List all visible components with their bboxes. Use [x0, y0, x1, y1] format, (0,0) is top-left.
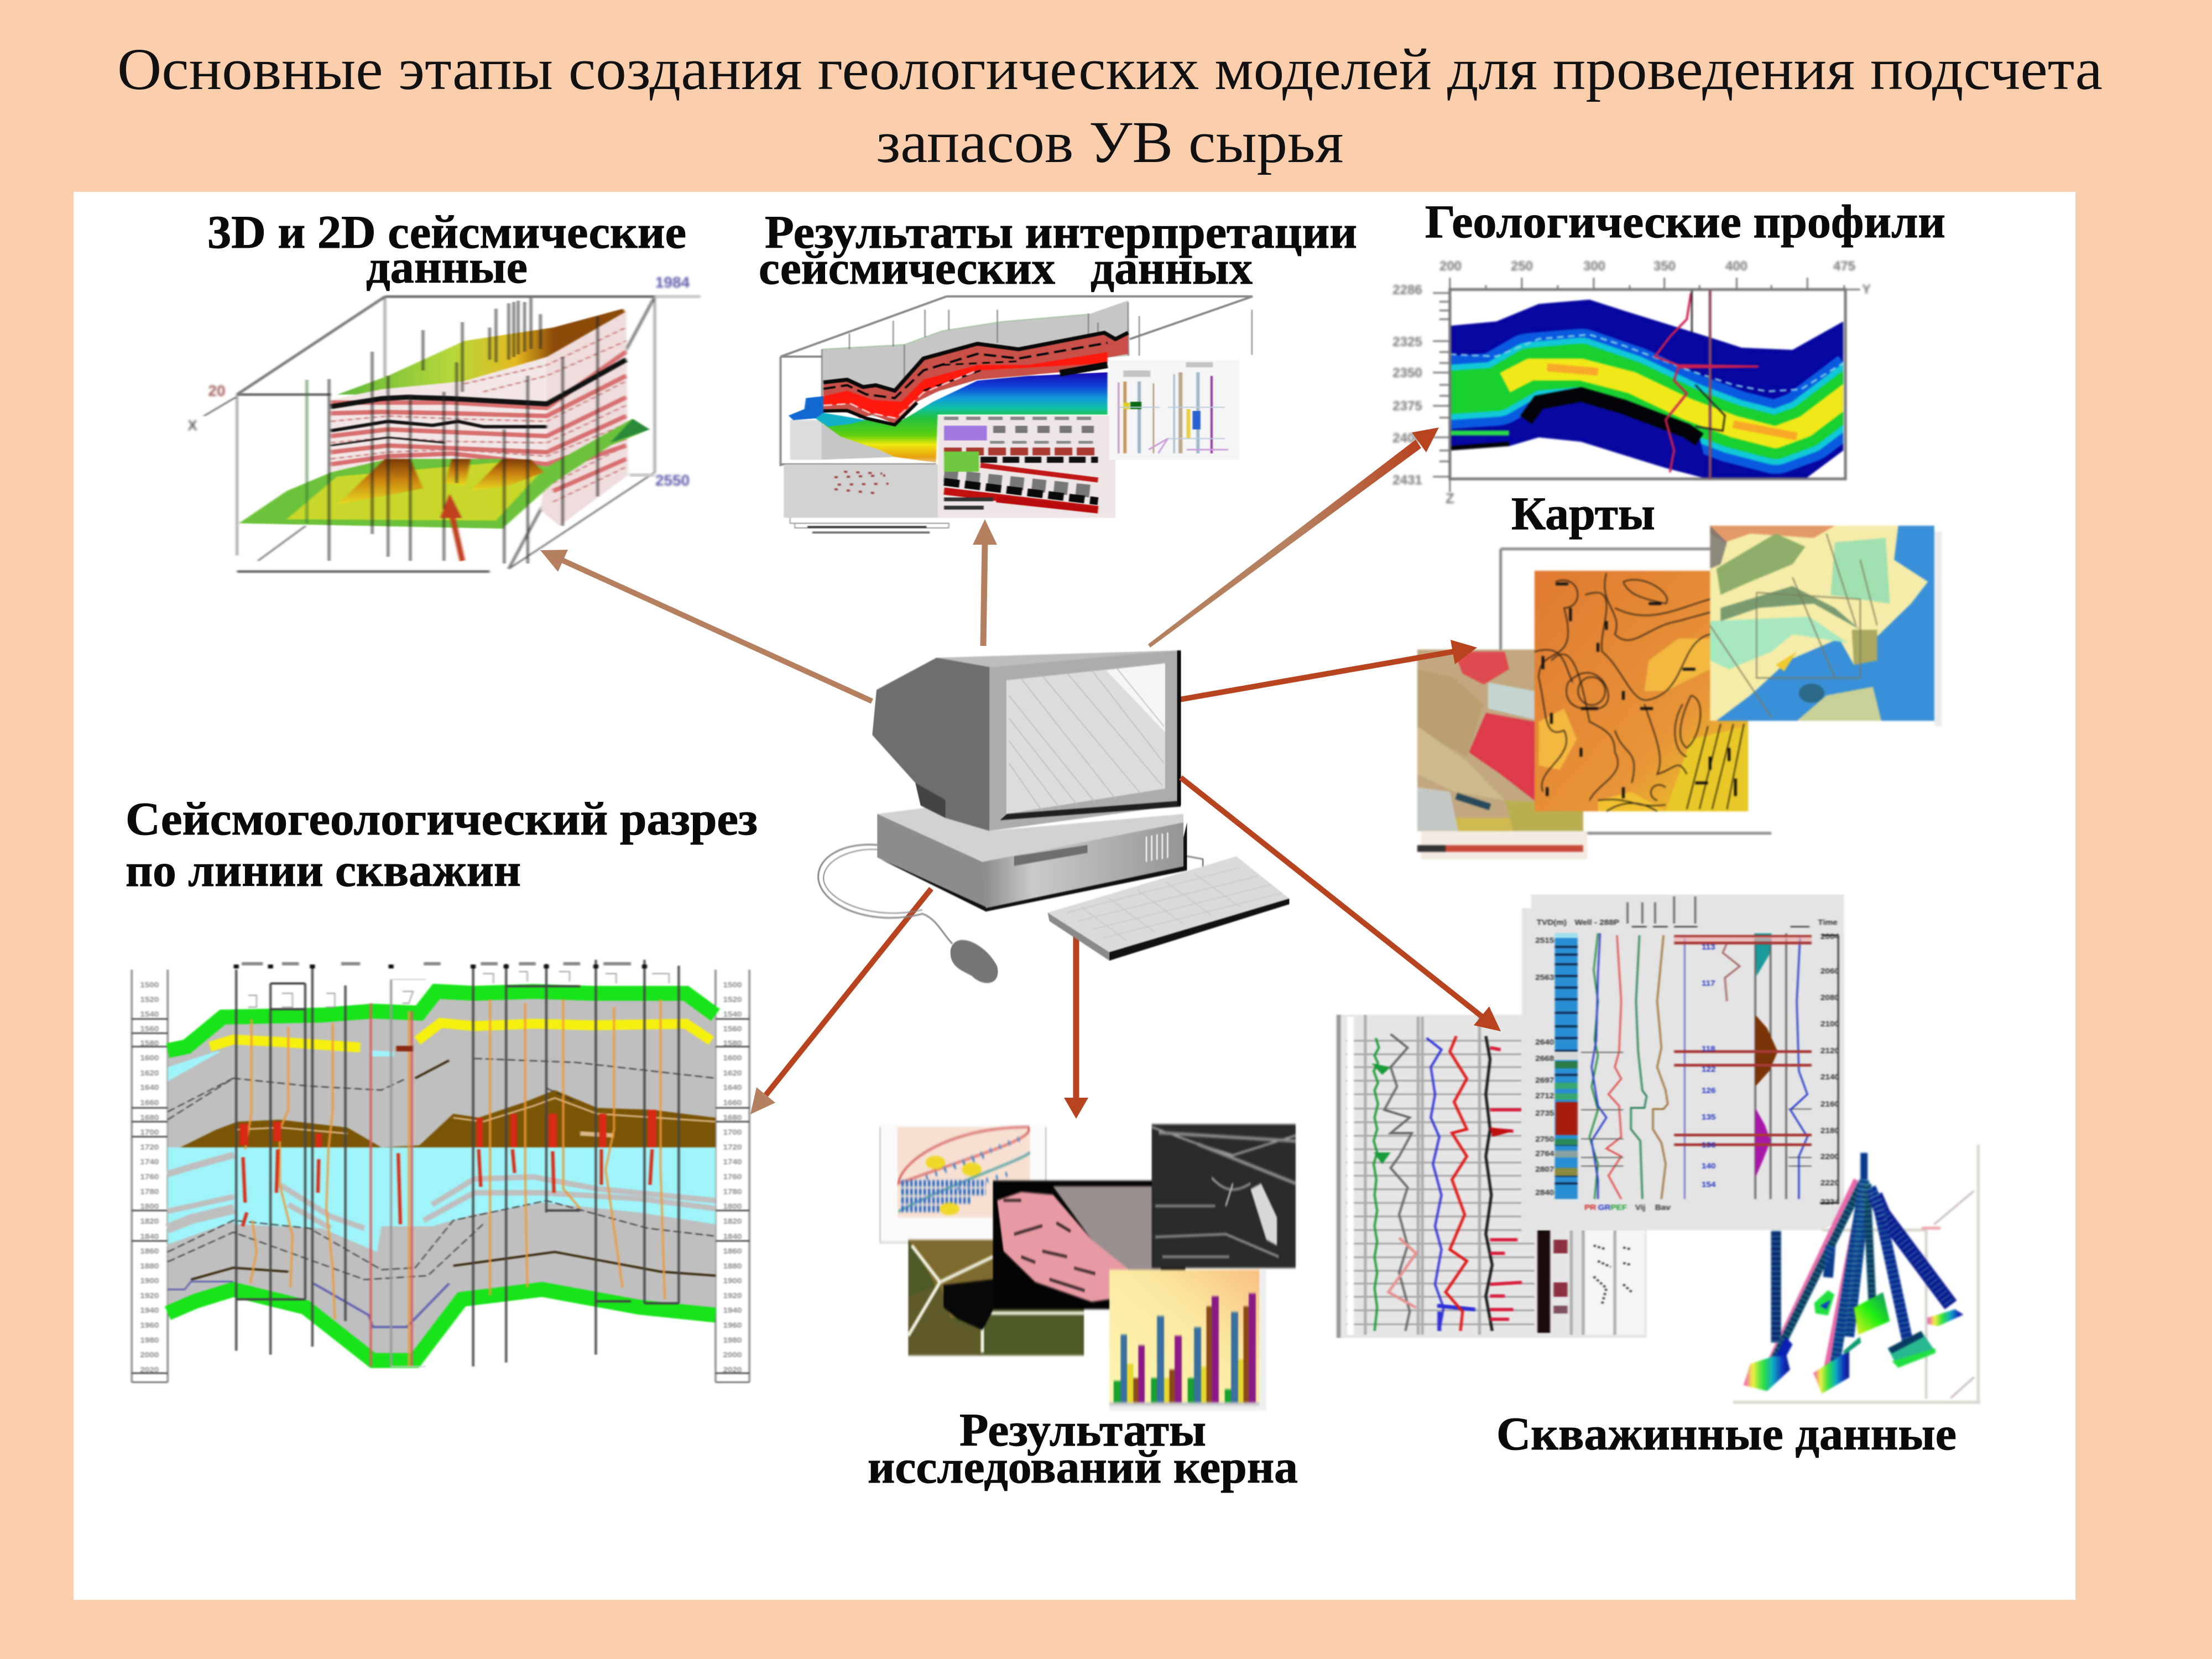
- heading: core study results: [868, 1404, 1298, 1493]
- chart: well log right panel: 2200: [1820, 1152, 1839, 1161]
- chart: seismogeological well-line section: 1500: [723, 981, 742, 989]
- chart: seismogeological well-line section: 1640: [723, 1084, 742, 1092]
- chart: seismogeological well-line section: 1680: [723, 1114, 742, 1122]
- chart: small well log inset: [1109, 361, 1239, 460]
- chart: well log right panel: 118: [1702, 1045, 1715, 1053]
- chart: seismogeological well-line section: [132, 960, 749, 1383]
- chart: seismogeological well-line section: 1960: [723, 1321, 742, 1330]
- axis labels: profile: 2431: [1392, 473, 1422, 488]
- chart: seismogeological well-line section: 1940: [723, 1306, 742, 1315]
- chart: well log right panel: 2712: [1535, 1092, 1554, 1100]
- axis labels: cube: 2550: [655, 472, 690, 489]
- arrow: to 3D seismic: [540, 550, 872, 701]
- chart: seismogeological well-line section: 1760: [723, 1173, 742, 1181]
- chart: seismic interpretation results: [780, 296, 1253, 533]
- photo: SEM grayscale: [1152, 1124, 1296, 1268]
- axis labels: profile: 475: [1833, 259, 1855, 274]
- chart: well log right panel: PR: [1584, 1203, 1597, 1212]
- chart: seismogeological well-line section: 1900: [140, 1277, 159, 1285]
- chart: well log right panel: 126: [1702, 1087, 1716, 1095]
- chart: well log right panel: 140: [1702, 1162, 1716, 1171]
- axis labels: profile: 2400: [1392, 431, 1422, 446]
- chart: seismogeological well-line section: 1560: [140, 1025, 159, 1034]
- arrow: red arrow in cube: [440, 494, 462, 561]
- chart: seismogeological well-line section: 1660: [723, 1099, 742, 1107]
- chart: well log right panel: 2220: [1820, 1179, 1839, 1187]
- chart: well log right panel: 122: [1702, 1066, 1716, 1074]
- chart: seismogeological well-line section: 1700: [140, 1128, 159, 1137]
- chart: seismogeological well-line section: 1920: [723, 1292, 742, 1300]
- chart: core scatter plot: [880, 1124, 1046, 1243]
- chart: seismogeological well-line section: 2020: [723, 1366, 742, 1375]
- chart: seismogeological well-line section: 1540: [723, 1010, 742, 1019]
- heading: seismic interpretation results: [759, 206, 1357, 294]
- chart: seismogeological well-line section: 1600: [140, 1054, 159, 1063]
- chart: well log right panel: 2807: [1535, 1166, 1554, 1174]
- chart: well log right panel: 2100: [1820, 1020, 1839, 1029]
- chart: seismogeological well-line section: 1960: [140, 1321, 159, 1330]
- chart: seismogeological well-line section: 1780: [140, 1188, 159, 1197]
- chart: well log right panel: 2563: [1535, 973, 1554, 982]
- heading: seismogeological section: [126, 793, 758, 896]
- heading: geological profiles: Геологические профили: [1425, 196, 1945, 248]
- chart: seismogeological well-line section: 1840: [723, 1233, 742, 1241]
- axis labels: profile: Z: [1446, 490, 1454, 507]
- axis labels: cube: 20: [208, 382, 226, 399]
- axis labels: profile: 2325: [1392, 335, 1422, 349]
- heading: 3D and 2D seismic data: 3D и 2D сейсмические: [207, 206, 686, 258]
- chart: seismogeological well-line section: 1680: [140, 1114, 159, 1122]
- chart: geological profile: [1433, 278, 1860, 492]
- chart: seismogeological well-line section: 1500: [140, 981, 159, 989]
- arrow: to well data: [1181, 778, 1501, 1031]
- title: запасов УВ сырья: [876, 110, 1344, 175]
- chart: seismogeological well-line section: 2020: [140, 1366, 159, 1375]
- chart: well log right panel: 154: [1702, 1181, 1716, 1189]
- chart: well log right panel: 117: [1702, 979, 1715, 988]
- axis labels: profile: [1392, 259, 1871, 507]
- arrow: to core results: [1064, 935, 1088, 1119]
- axis labels: profile: 400: [1725, 259, 1747, 274]
- axis labels: profile: 200: [1439, 259, 1462, 274]
- chart: well log right panel: 2697: [1535, 1076, 1554, 1085]
- chart: seismogeological well-line section: 1860: [723, 1247, 742, 1256]
- chart: seismogeological well-line section: 1880: [723, 1262, 742, 1271]
- chart: well log right panel: 2750: [1535, 1135, 1554, 1144]
- chart: stripe table: [938, 415, 1115, 518]
- icon part: monitor: [872, 650, 1181, 831]
- chart: seismogeological well-line section: 1800: [723, 1203, 742, 1211]
- icon part: keyboard: [1047, 856, 1289, 961]
- chart: 3D directional wells: [1733, 1145, 1980, 1402]
- chart: bar chart: [1109, 1270, 1266, 1411]
- chart: seismogeological well-line section: 1520: [723, 995, 742, 1004]
- chart: seismogeological well-line section: 1620: [723, 1069, 742, 1078]
- chart: well log right panel: 2515: [1535, 937, 1554, 945]
- heading: seismic interpretation results: сейсмических данных: [759, 242, 1253, 294]
- chart: well log right panel: 2080: [1820, 994, 1839, 1002]
- chart: well log right panel: Vij: [1635, 1203, 1645, 1212]
- heading: seismogeological section: Сейсмогеологический разрез: [126, 793, 758, 845]
- heading: well data: Скважинные данные: [1496, 1408, 1957, 1460]
- chart: seismogeological well-line section: 1580: [140, 1040, 159, 1048]
- chart: well log right panel: 2180: [1820, 1126, 1839, 1135]
- chart: seismogeological well-line section: 1880: [140, 1262, 159, 1271]
- title: Основные этапы создания геологических моделей для проведения подсчета: [117, 37, 2103, 102]
- photo: thin section olive: [908, 1240, 1084, 1355]
- chart: seismogeological well-line section: 1820: [723, 1218, 742, 1226]
- chart: seismogeological well-line section: 1800: [140, 1203, 159, 1211]
- icon part: base unit: [877, 806, 1187, 911]
- arrow: to profiles: [1148, 427, 1439, 648]
- chart: well log right panel: 2160: [1820, 1100, 1839, 1109]
- chart: seismogeological well-line section: 1660: [140, 1099, 159, 1107]
- white panel: [74, 192, 2075, 1600]
- chart: well log right panel: Well - 288P: [1575, 919, 1619, 927]
- chart: well log right panel: 2640: [1535, 1039, 1554, 1047]
- chart: seismogeological well-line section: 1780: [723, 1188, 742, 1197]
- icon: computer: [818, 650, 1289, 983]
- chart: well log right panel: Time: [1818, 919, 1838, 927]
- axis labels: profile: 250: [1511, 259, 1533, 274]
- axis labels: profile: 300: [1583, 259, 1605, 274]
- heading: 3D and 2D seismic data: данные: [366, 241, 528, 293]
- chart: seismogeological well-line section: 1580: [723, 1040, 742, 1048]
- chart: seismogeological well-line section: 1640: [140, 1084, 159, 1092]
- icon part: mouse cord: [818, 844, 1203, 943]
- chart: well log right panel: 2140: [1820, 1073, 1839, 1082]
- chart: seismogeological well-line section: 2000: [140, 1351, 159, 1359]
- chart: seismogeological well-line section: 1720: [140, 1143, 159, 1152]
- chart: seismogeological well-line section: 1600: [723, 1054, 742, 1063]
- chart: seismogeological well-line section: 1940: [140, 1306, 159, 1315]
- axis labels: cube: X: [187, 417, 197, 434]
- heading: core study results: исследований керна: [868, 1441, 1298, 1493]
- axis labels: cube: [187, 274, 690, 489]
- chart: well log right panel: PEF: [1611, 1203, 1627, 1212]
- chart: maps: [1417, 526, 1942, 859]
- chart: seismogeological well-line section: 1900: [723, 1277, 742, 1285]
- axis labels: cube: 1984: [655, 274, 690, 291]
- chart: seismogeological well-line section: 1620: [140, 1069, 159, 1078]
- chart: well log right panel: TVD(m): [1537, 919, 1567, 927]
- heading: core study results: Результаты: [959, 1404, 1206, 1456]
- chart: seismogeological well-line section: 1760: [140, 1173, 159, 1181]
- chart: well log right panel: 2004: [1820, 933, 1840, 941]
- chart: seismogeological well-line section: 2000: [723, 1351, 742, 1359]
- chart: well log right panel: GR: [1598, 1203, 1611, 1212]
- title: [117, 37, 2103, 175]
- axis labels: profile: Y: [1862, 282, 1871, 297]
- chart: seismogeological well-line section: 1520: [140, 995, 159, 1004]
- heading: seismic interpretation results: Результаты интерпретации: [765, 206, 1357, 258]
- chart: seismogeological well-line section: 1840: [140, 1233, 159, 1241]
- chart: seismogeological well-line section: 1740: [723, 1158, 742, 1166]
- map: regional right: [1710, 526, 1942, 726]
- axis labels: profile: 2350: [1392, 366, 1422, 380]
- chart: seismogeological well-line section: 1820: [140, 1218, 159, 1226]
- chart: well log right panel: 2840: [1535, 1189, 1554, 1197]
- chart: seismogeological well-line section: 1980: [140, 1337, 159, 1345]
- heading: maps: Карты: [1511, 488, 1655, 540]
- icon part: mouse: [951, 940, 998, 983]
- chart: well log right panel: 2764: [1535, 1150, 1554, 1158]
- map: geological left: [1417, 650, 1587, 859]
- chart: seismogeological well-line section: 1920: [140, 1292, 159, 1300]
- chart: well log right panel: Bav: [1655, 1203, 1671, 1212]
- chart: well log right panel: 135: [1702, 1113, 1716, 1121]
- chart: seismogeological well-line section: 1540: [140, 1010, 159, 1019]
- chart: seismogeological well-line section: 1980: [723, 1337, 742, 1345]
- chart: well log right panel: 2060: [1820, 967, 1839, 975]
- chart: 3D seismic cube: [204, 296, 701, 572]
- heading: 3D and 2D seismic data: [207, 206, 686, 293]
- heading: seismogeological section: по линии скважин: [126, 844, 521, 896]
- chart: well log right panel: 136: [1702, 1141, 1716, 1150]
- chart: well log right panel: 2668: [1535, 1055, 1554, 1063]
- chart: seismogeological well-line section: 1740: [140, 1158, 159, 1166]
- axis labels: profile: 2286: [1392, 283, 1422, 298]
- axis labels: profile: 2375: [1392, 399, 1422, 414]
- chart: seismogeological well-line section: 1700: [723, 1128, 742, 1137]
- arrow: to interpretation: [973, 519, 997, 646]
- chart: well log right panel: 113: [1702, 943, 1715, 952]
- map: contour: [1535, 571, 1748, 811]
- chart: well log right panel: 2735: [1535, 1109, 1554, 1118]
- chart: seismogeological well-line section: 1560: [723, 1025, 742, 1034]
- chart: well log right panel: [1522, 895, 1844, 1230]
- arrow: to maps: [1180, 640, 1477, 700]
- chart: seismogeological well-line section: 1860: [140, 1247, 159, 1256]
- arrow: to section: [750, 889, 931, 1114]
- chart: core study collage: [880, 1124, 1296, 1411]
- chart: seismogeological well-line section: 1720: [723, 1143, 742, 1152]
- chart: well log right panel: 2234: [1820, 1198, 1840, 1207]
- axis labels: profile: 350: [1653, 259, 1676, 274]
- chart: well log right panel: 2120: [1820, 1047, 1839, 1055]
- chart: well log left panel: [1337, 1015, 1647, 1338]
- photo: pink microsection: [993, 1181, 1185, 1309]
